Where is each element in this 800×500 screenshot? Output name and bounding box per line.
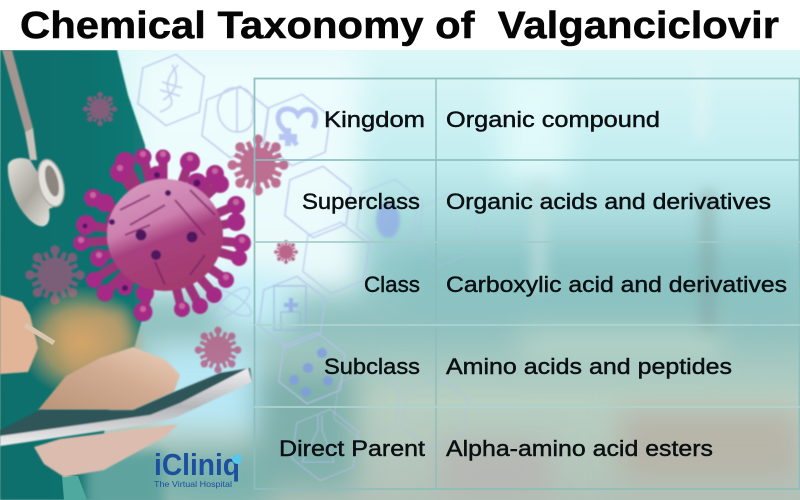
chest piece: [8, 158, 58, 226]
virus stems: [86, 162, 236, 306]
row: Class: Carboxylic acid and derivatives: [446, 272, 787, 297]
virus above tablet: [196, 328, 240, 372]
stethoscope: [2, 50, 68, 226]
pink virus top right: [230, 137, 286, 193]
row: Subclass: Amino acids and peptides: [446, 354, 732, 379]
virus surface shadows: [120, 190, 215, 285]
row: Kingdom: Organic compound: [446, 107, 660, 132]
lower hand: [34, 424, 178, 477]
writing hand: [0, 295, 38, 374]
medical icon hexagons: [135, 50, 481, 485]
icon: heart with cross: [278, 109, 316, 145]
row: Superclass: Superclass: [302, 189, 420, 214]
row: Kingdom: Kingdom: [324, 107, 425, 132]
logo: iCliniq: iCliniq: [154, 447, 240, 482]
row: Class: Class: [364, 272, 420, 297]
lower sleeve: [62, 476, 87, 500]
tan sleeve area: [60, 308, 135, 375]
lower background shade: [85, 450, 165, 500]
row: Direct Parent: [279, 436, 713, 461]
tablet: [0, 368, 252, 446]
upper hand: [38, 347, 180, 410]
tiny virus: [275, 241, 297, 263]
row: Kingdom: [326, 110, 659, 132]
pen: [25, 325, 54, 343]
icon: hospital cross: [284, 298, 298, 312]
icon: syringe drop: [376, 202, 400, 238]
knob highlights: [78, 151, 245, 312]
row: Superclass: Organic acids and derivatives: [446, 189, 771, 214]
taxonomy table grid: [254, 78, 800, 489]
logo: iCliniq: The Virtual Hospital: [154, 479, 232, 489]
virus knobs: [73, 148, 251, 322]
row: Direct Parent: Direct Parent: [279, 436, 425, 461]
orange glow: [29, 288, 143, 390]
small virus cluster: [28, 93, 297, 372]
scrubs torso: [0, 50, 150, 500]
row: Subclass: [324, 354, 732, 379]
icon: cross: [279, 128, 297, 146]
icon: hospital: [274, 286, 306, 330]
virus pores: [82, 172, 200, 291]
icon: molecule dots: [289, 348, 333, 397]
icon: DNA helix: [160, 65, 182, 112]
icon: flask: [302, 415, 334, 462]
icon: brain: [218, 88, 253, 132]
virus on scrubs: [84, 93, 116, 125]
tube: [2, 50, 33, 132]
row: Subclass: Subclass: [324, 354, 420, 379]
title: Chemical Taxonomy of Valganciclovir: [20, 5, 779, 47]
row: Direct Parent: Alpha-amino acid esters: [446, 436, 713, 461]
large virus: [73, 148, 251, 322]
row: Superclass: [302, 189, 771, 214]
white title band: [0, 0, 800, 50]
virus body: [107, 179, 223, 291]
virus at left shoulder: [28, 248, 82, 302]
icon: atom: [214, 286, 252, 318]
